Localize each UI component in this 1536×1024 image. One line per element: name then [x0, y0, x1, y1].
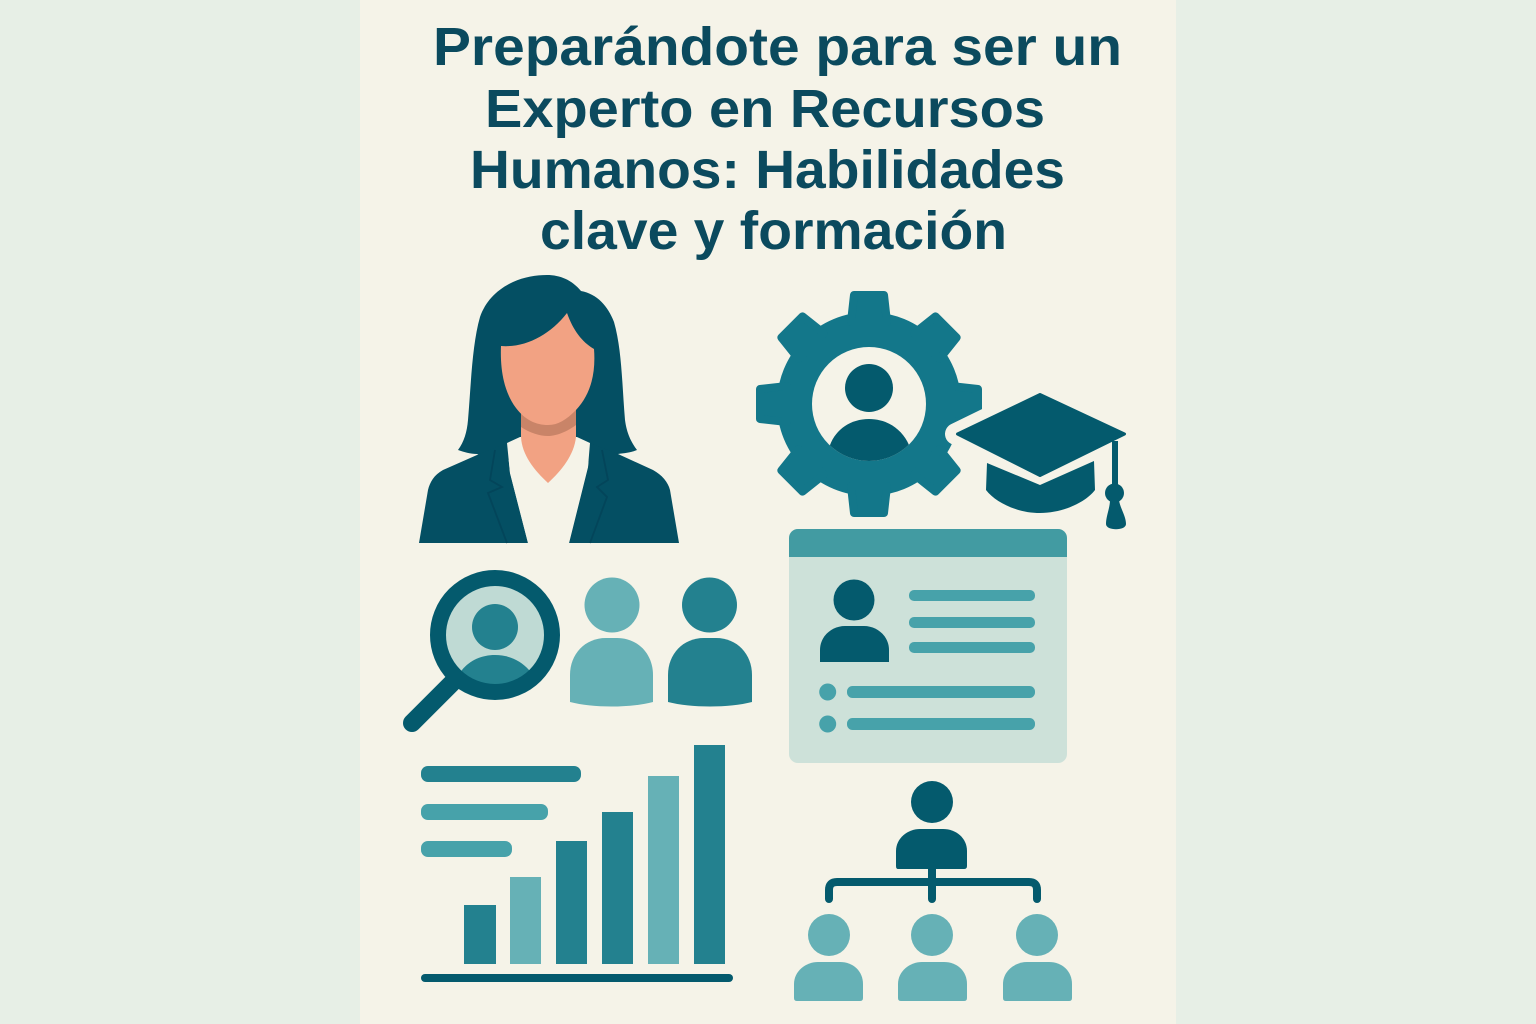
- report 2 body: [898, 962, 967, 1001]
- title: [433, 17, 1122, 261]
- icon: magnifier over candidate: [412, 578, 552, 723]
- gear teeth: [760, 295, 978, 513]
- left lapel: [488, 450, 507, 543]
- icon: dark person: [668, 578, 752, 706]
- title line 2: Experto en Recursos: [485, 79, 1045, 139]
- icon: light person: [570, 578, 653, 706]
- tassel knot: [1105, 484, 1124, 502]
- gear person body: [830, 419, 909, 461]
- connector: [829, 866, 1037, 899]
- list line: [847, 718, 1035, 730]
- card person head: [834, 580, 874, 620]
- bar 2: [510, 877, 541, 964]
- gear hole: [812, 347, 926, 461]
- cap halo: [956, 393, 1126, 477]
- chart baseline: [421, 974, 733, 982]
- hair: [458, 275, 637, 460]
- cap base: [986, 461, 1095, 513]
- gear person head: [845, 364, 893, 412]
- infographic canvas: [360, 0, 1176, 1024]
- head: [584, 578, 640, 632]
- card person body: [820, 626, 889, 662]
- title line 4: clave y formación: [540, 201, 1007, 261]
- tassel cord: [1112, 441, 1118, 491]
- card body: [789, 529, 1067, 763]
- legend line: [421, 841, 512, 857]
- manager head: [911, 781, 953, 823]
- manager body: [896, 829, 967, 869]
- report 2 head: [911, 914, 953, 956]
- lens ring: [438, 578, 552, 692]
- bullet: [819, 716, 836, 732]
- text line: [909, 642, 1035, 653]
- jacket right: [569, 443, 679, 543]
- legend line: [421, 804, 548, 820]
- report 3 head: [1016, 914, 1058, 956]
- report 3 body: [1003, 962, 1072, 1001]
- org chart: [794, 781, 1072, 1001]
- jacket left: [419, 443, 528, 543]
- report 1 body: [794, 962, 863, 1001]
- bar 6: [694, 745, 725, 964]
- bar 4: [602, 812, 633, 964]
- icon: gear with person: [760, 295, 978, 513]
- head: [682, 578, 737, 632]
- body: [668, 638, 752, 706]
- lens person head: [472, 604, 518, 650]
- handle: [412, 683, 452, 723]
- face: [501, 313, 594, 425]
- title line 1: Preparándote para ser un: [433, 17, 1122, 77]
- neck shadow: [521, 405, 576, 436]
- panel: resume card: [789, 529, 1067, 763]
- list line: [847, 686, 1035, 698]
- icon: graduation cap: [956, 393, 1126, 529]
- gear body: [777, 312, 961, 496]
- title line 3: Humanos: Habilidades: [470, 140, 1065, 200]
- bullet: [819, 684, 836, 700]
- neck: [521, 405, 576, 483]
- icon: HR professional woman: [419, 275, 679, 543]
- bar chart: [421, 745, 733, 982]
- lens: [445, 585, 545, 685]
- bar 3: [556, 841, 587, 964]
- tassel end: [1106, 500, 1126, 529]
- bar 5: [648, 776, 679, 964]
- bar 1: [464, 905, 496, 964]
- card header: [789, 529, 1067, 557]
- legend line: [421, 766, 581, 782]
- report 1 head: [808, 914, 850, 956]
- text line: [909, 590, 1035, 601]
- right lapel: [590, 450, 608, 543]
- body: [570, 638, 653, 706]
- text line: [909, 617, 1035, 628]
- lens person body: [462, 655, 529, 684]
- cap board: [958, 394, 1124, 476]
- central panel: [360, 0, 1176, 1024]
- shirt: [507, 437, 590, 543]
